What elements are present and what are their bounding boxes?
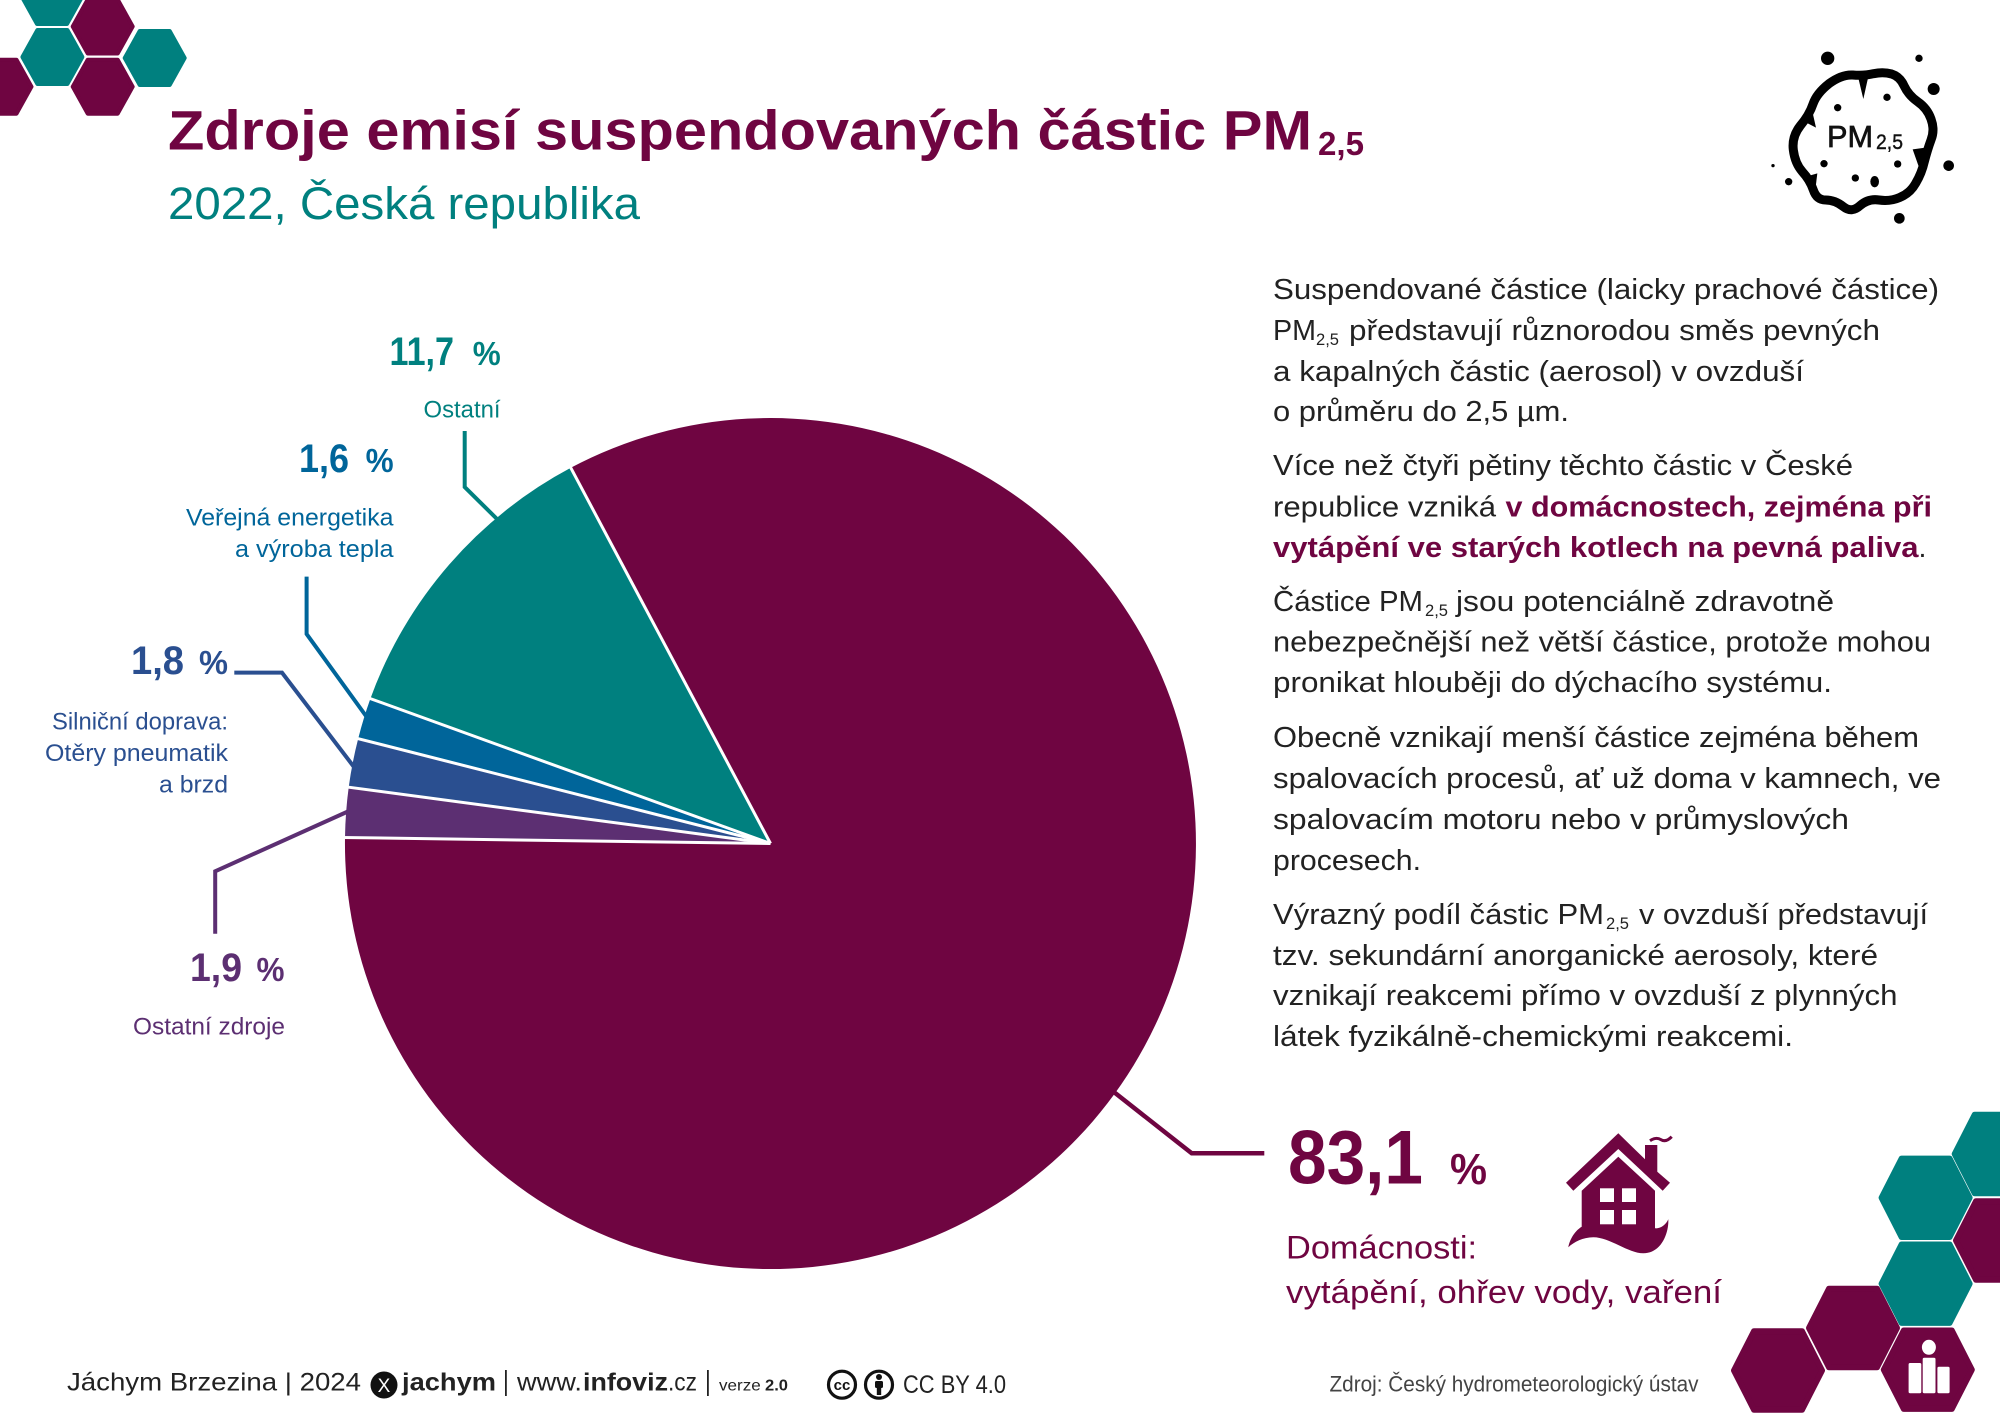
- paragraph 1: 2,5: [1316, 330, 1339, 349]
- footer: author and links: verze: [719, 1378, 761, 1395]
- paragraph 4: spalovacím motoru nebo v průmyslových: [1273, 804, 1849, 836]
- license: CC BY 4.0: [828, 1371, 1006, 1399]
- source: Zdroj: Český hydrometeorologický ústav: [1330, 1372, 1698, 1397]
- label: 1,8 % Silniční doprava: a brzd: [159, 771, 228, 798]
- label: 1,8 % Silniční doprava: Otěry pneumatik: [45, 740, 229, 767]
- leader line: Ostatní zdroje: [215, 811, 349, 934]
- title: 2,5: [1318, 125, 1364, 162]
- leader line: Veřejná energetika: [307, 577, 366, 716]
- label: 83,1 % Domácnosti: [1286, 1115, 1722, 1310]
- license: CC BY 4.0: CC BY 4.0: [903, 1371, 1006, 1399]
- icon: PM2,5 particle cloud: [1771, 52, 1954, 224]
- leader line: Silniční doprava: [234, 673, 354, 767]
- paragraph 1: představují různorodou směs pevných: [1349, 315, 1880, 347]
- paragraph 1: Suspendované částice (laicky prachové částice): [1273, 274, 1939, 306]
- paragraph 3: Částice PM: [1273, 586, 1423, 618]
- label: 1,9 % Ostatní zdroje: [133, 946, 285, 1041]
- label: 83,1 % Domácnosti: vytápění, ohřev vody, vaření: [1286, 1274, 1722, 1310]
- pie chart: [342, 418, 1196, 1269]
- leader line: Ostatní: [465, 431, 497, 519]
- paragraph 1: o průměru do 2,5 µm.: [1273, 396, 1569, 428]
- paragraph 5: 2,5: [1606, 914, 1629, 933]
- label: 11,7 % Ostatní: Ostatní: [424, 397, 501, 424]
- paragraph 4: spalovacích procesů, ať už doma v kamnech, ve: [1273, 763, 1941, 795]
- icon: X logo: X: [378, 1376, 391, 1397]
- paragraph 3: pronikat hlouběji do dýchacího systému.: [1273, 667, 1832, 699]
- label: 1,6 % Veřejná energetika: a výroba tepla: [235, 536, 394, 563]
- text block: explanation: [1273, 274, 1941, 1053]
- hexagon decoration: top left: [0, 0, 185, 114]
- label: 11,7 % Ostatní: [390, 330, 501, 424]
- slice: Veřejná energetika 1,6 %: [358, 699, 770, 844]
- paragraph 2: Více než čtyři pětiny těchto částic v České: [1273, 450, 1853, 482]
- paragraph 3: nebezpečnější než větší částice, protože mohou: [1273, 627, 1931, 659]
- paragraph 1: [1273, 274, 1939, 428]
- leader line: Domácnosti: [1105, 1085, 1264, 1153]
- label: 1,6 % Veřejná energetika: 1,6: [299, 437, 349, 481]
- paragraph 4: Obecně vznikají menší částice zejména během: [1273, 722, 1919, 754]
- icon: CC: [828, 1371, 856, 1398]
- paragraph 5: v ovzduší představují: [1639, 899, 1928, 931]
- paragraph 3: jsou potenciálně zdravotně: [1455, 586, 1834, 618]
- icon: X logo: [370, 1372, 398, 1398]
- label: 1,6 % Veřejná energetika: %: [366, 442, 394, 479]
- paragraph 1: PM: [1273, 315, 1316, 347]
- label: 1,8 % Silniční doprava: %: [199, 644, 228, 681]
- label: 1,8 % Silniční doprava: Silniční doprava:: [52, 708, 228, 735]
- paragraph 5: tzv. sekundární anorganické aerosoly, které: [1273, 940, 1878, 972]
- paragraph 3: 2,5: [1425, 601, 1448, 620]
- label: 83,1 % Domácnosti: 83,1: [1288, 1115, 1423, 1200]
- paragraph 4: procesech.: [1273, 845, 1421, 877]
- label: 1,9 % Ostatní zdroje: Ostatní zdroje: [133, 1014, 285, 1041]
- slice: Silniční doprava 1,8 %: [349, 739, 770, 844]
- icon: infoviz logo: [1909, 1340, 1950, 1393]
- icon: PM2,5 particle cloud: PM: [1827, 119, 1873, 154]
- footer: author and links: infoviz: [583, 1369, 668, 1397]
- paragraph 5: látek fyzikálně-chemickými reakcemi.: [1273, 1021, 1793, 1053]
- footer: author and links: Jáchym Brzezina | 2024: [67, 1369, 361, 1397]
- paragraph 1: a kapalných částic (aerosol) v ovzduší: [1273, 356, 1804, 388]
- paragraph 3: [1273, 586, 1931, 699]
- footer: author and links: .cz: [668, 1369, 697, 1397]
- label: 83,1 % Domácnosti: %: [1450, 1145, 1487, 1194]
- label: 1,9 % Ostatní zdroje: 1,9: [190, 946, 242, 990]
- title: Zdroje emisí suspendovaných částic PM: [168, 98, 1312, 162]
- paragraph 2: v domácnostech, zejména při: [1506, 492, 1932, 524]
- label: 1,6 % Veřejná energetika: Veřejná energetika: [186, 505, 394, 532]
- label: 1,8 % Silniční doprava: 1,8: [131, 639, 184, 683]
- icon: attribution: [866, 1371, 892, 1398]
- paragraph 2: .: [1918, 532, 1926, 564]
- label: 83,1 % Domácnosti: Domácnosti:: [1286, 1229, 1477, 1265]
- paragraph 5: Výrazný podíl částic PM: [1273, 899, 1604, 931]
- footer: author and links: [67, 1369, 788, 1398]
- paragraph 5: [1273, 899, 1928, 1053]
- paragraph 5: vznikají reakcemi přímo v ovzduší z plynných: [1273, 980, 1898, 1012]
- icon: PM2,5 particle cloud: 2,5: [1876, 131, 1903, 154]
- label: 1,9 % Ostatní zdroje: %: [256, 951, 284, 988]
- slice: Domácnosti 83,1 %: [345, 418, 1196, 1269]
- paragraph 2: vytápění ve starých kotlech na pevná paliva: [1273, 532, 1920, 564]
- paragraph 2: republice vzniká: [1273, 492, 1496, 524]
- paragraph 2: [1273, 450, 1932, 564]
- footer: author and links: jachym: [401, 1369, 496, 1397]
- label: 11,7 % Ostatní: %: [473, 335, 501, 372]
- slice: Ostatní zdroje 1,9 %: [345, 787, 770, 844]
- footer: author and links: www.: [516, 1369, 582, 1397]
- icon: CC: cc: [834, 1377, 850, 1394]
- label: 1,8 % Silniční doprava: [45, 639, 229, 798]
- subtitle: 2022, Česká republika: [168, 178, 641, 229]
- icon: house with smoke: [1566, 1133, 1672, 1253]
- hexagon decoration: bottom right: [1734, 1115, 2000, 1410]
- paragraph 4: [1273, 722, 1941, 877]
- slice: Ostatní 11,7 %: [370, 468, 770, 844]
- label: 1,6 % Veřejná energetika: [186, 437, 394, 563]
- footer: author and links: 2.0: [765, 1378, 788, 1395]
- label: 11,7 % Ostatní: 11,7: [390, 330, 454, 374]
